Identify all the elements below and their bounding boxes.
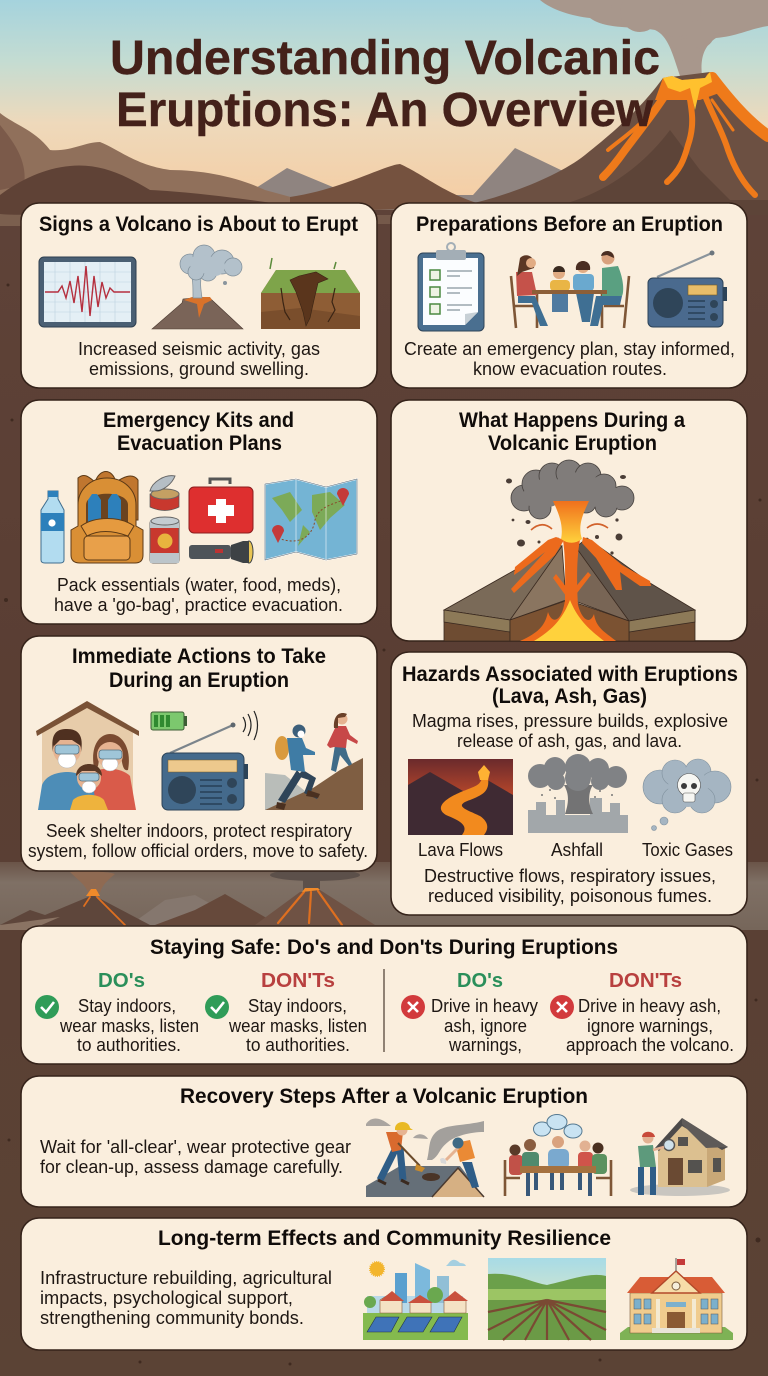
panel: do's and don'ts — [21, 926, 747, 1064]
column: don'ts left: to authorities. — [246, 1035, 350, 1055]
description top: release of ash, gas, and lava. — [457, 731, 682, 751]
heading: During an Eruption — [109, 669, 289, 692]
column: don'ts right: DON'Ts — [609, 970, 682, 992]
icon: check — [35, 995, 59, 1019]
icon: family in house with masks — [36, 701, 139, 810]
description bottom: reduced visibility, poisonous fumes. — [428, 886, 712, 906]
ash cloud — [511, 460, 634, 519]
icon: water bottle — [41, 491, 64, 563]
lava — [511, 537, 651, 641]
smoke plume — [540, 0, 768, 76]
panel: emergency kits and evacuation plans — [21, 400, 377, 624]
heading: Volcanic Eruption — [488, 432, 657, 455]
icon: canned food — [150, 476, 179, 563]
description: for clean-up, assess damage carefully. — [40, 1157, 343, 1177]
panel: immediate actions to take — [21, 636, 377, 871]
ground specks — [4, 284, 762, 1366]
icon: cracked ground — [261, 258, 360, 329]
icon: first aid kit — [189, 479, 253, 533]
column: don'ts right: ignore warnings, — [587, 1016, 713, 1036]
panel: long-term effects — [21, 1218, 747, 1350]
label: ashfall: Ashfall — [551, 840, 603, 860]
icon: clean-up workers on roof — [366, 1118, 484, 1197]
heading: (Lava, Ash, Gas) — [492, 685, 647, 708]
description: impacts, psychological support, — [40, 1288, 293, 1308]
heading: Staying Safe: Do's and Don'ts During Eruptions — [150, 936, 618, 959]
column: do's right — [401, 970, 538, 1055]
description bottom — [424, 866, 716, 906]
icon: community meeting — [505, 1114, 611, 1196]
icon: volcano with gas — [152, 245, 243, 329]
description: Create an emergency plan, stay informed, — [404, 339, 735, 359]
description: know evacuation routes. — [473, 359, 667, 379]
title: Understanding Volcanic — [110, 32, 660, 85]
panel: recovery steps — [21, 1076, 747, 1207]
icon: battery — [151, 712, 187, 730]
heading: Preparations Before an Eruption — [416, 213, 723, 236]
column: do's left: to authorities. — [77, 1035, 181, 1055]
panel: what happens during a volcanic eruption — [391, 400, 747, 641]
column: do's left: Stay indoors, — [78, 996, 176, 1016]
description — [78, 339, 320, 379]
eruption column — [553, 501, 589, 543]
icon: radio with signal — [162, 711, 258, 810]
column: don'ts right — [550, 970, 734, 1055]
column: do's right: DO's — [457, 970, 503, 992]
column: don'ts left — [205, 970, 367, 1055]
column: do's right: Drive in heavy — [431, 996, 538, 1016]
icon: toxic gas skull cloud — [643, 759, 731, 830]
column: do's right: ash, ignore — [444, 1016, 527, 1036]
heading — [459, 409, 685, 455]
column: don'ts left: wear masks, listen — [228, 1016, 367, 1036]
heading: Recovery Steps After a Volcanic Eruption — [180, 1085, 588, 1108]
description: have a 'go-bag', practice evacuation. — [54, 595, 343, 615]
description: strengthening community bonds. — [40, 1308, 304, 1328]
heading — [402, 663, 738, 708]
icon: cross — [401, 995, 425, 1019]
panel: hazards associated with eruptions — [391, 652, 747, 915]
image: lava flows — [408, 759, 513, 835]
heading: Evacuation Plans — [117, 432, 282, 455]
title — [110, 32, 660, 137]
description: Pack essentials (water, food, meds), — [57, 575, 341, 595]
column: do's left: wear masks, listen — [59, 1016, 199, 1036]
description: Seek shelter indoors, protect respiratory — [46, 821, 352, 841]
icon: backpack — [71, 472, 143, 563]
hiker woman — [327, 713, 358, 772]
left slope and right slope — [444, 538, 695, 641]
description — [404, 339, 735, 379]
description — [40, 1137, 351, 1177]
description top: Magma rises, pressure builds, explosive — [412, 711, 728, 731]
label: lava flows: Lava Flows — [418, 840, 503, 860]
panel: signs a volcano is about to erupt — [21, 203, 377, 388]
lower volcano band — [0, 862, 768, 930]
heading — [72, 645, 326, 692]
column: do's right: warnings, — [448, 1035, 522, 1055]
description: Wait for 'all-clear', wear protective gear — [40, 1137, 351, 1157]
description: Increased seismic activity, gas — [78, 339, 320, 359]
image: ashfall over city — [528, 754, 628, 833]
description top — [412, 711, 728, 751]
description — [54, 575, 343, 615]
distant mountains — [0, 113, 600, 215]
column: do's left: DO's — [98, 970, 145, 992]
icon: radio — [648, 250, 727, 327]
hiker man — [275, 724, 320, 810]
heading: Emergency Kits and — [103, 409, 294, 432]
ground band — [0, 214, 70, 226]
heading — [103, 409, 294, 455]
icon: damaged house inspection — [630, 1118, 730, 1196]
icon: hikers moving uphill — [265, 713, 363, 810]
title: Eruptions: An Overview — [116, 84, 654, 137]
panel: preparations before an eruption — [391, 203, 747, 388]
column: don'ts right: approach the volcano. — [566, 1035, 734, 1055]
image: farm fields — [488, 1258, 606, 1340]
illustration: volcano cross-section — [444, 460, 695, 641]
description — [28, 821, 368, 861]
heading: What Happens During a — [459, 409, 685, 432]
description: system, follow official orders, move to safety. — [28, 841, 368, 861]
column: don'ts right: Drive in heavy ash, — [578, 996, 721, 1016]
column: don'ts left: DON'Ts — [261, 970, 335, 992]
icon: checklist clipboard — [418, 243, 484, 331]
label: toxic gases: Toxic Gases — [642, 840, 733, 860]
icon: rebuilt city with solar panels — [363, 1260, 468, 1340]
icon: school building — [620, 1258, 733, 1340]
heading: Hazards Associated with Eruptions — [402, 663, 738, 686]
icon: cross — [550, 995, 574, 1019]
description — [40, 1268, 332, 1328]
icon: evacuation map — [265, 479, 357, 560]
heading: Signs a Volcano is About to Erupt — [39, 213, 358, 236]
column: do's left — [35, 970, 199, 1055]
flying rocks — [506, 475, 626, 555]
icon: check — [205, 995, 229, 1019]
icon: family planning at table — [511, 251, 629, 328]
erupting volcano — [470, 72, 768, 215]
icon: seismograph — [39, 257, 136, 327]
icon: flashlight — [189, 541, 253, 563]
heading: Immediate Actions to Take — [72, 645, 326, 668]
description bottom: Destructive flows, respiratory issues, — [424, 866, 716, 886]
description: emissions, ground swelling. — [89, 359, 309, 379]
column: don'ts left: Stay indoors, — [248, 996, 347, 1016]
description: Infrastructure rebuilding, agricultural — [40, 1268, 332, 1288]
heading: Long-term Effects and Community Resilience — [158, 1227, 611, 1250]
